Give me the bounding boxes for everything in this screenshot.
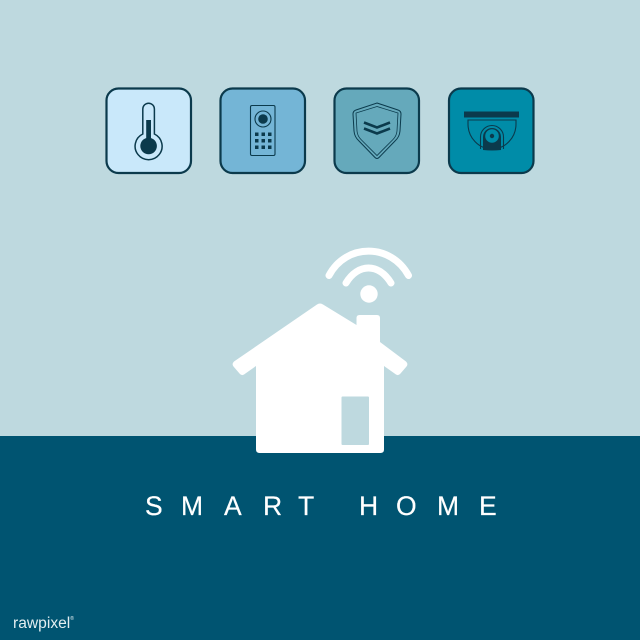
icon: video doorbell tile: [220, 88, 305, 173]
watermark: rawpixel logo: ®: [70, 615, 74, 622]
icon: house: [233, 304, 407, 453]
door: [342, 396, 369, 445]
icon: wifi signal: [329, 251, 408, 303]
icon: thermometer tile: [106, 88, 191, 173]
panel: dark ground band: [0, 436, 640, 640]
watermark: rawpixel logo: rawpixel: [13, 615, 70, 632]
icon: security shield tile: [334, 88, 419, 173]
icon: dome security camera tile: [449, 88, 534, 173]
panel: light sky background: [0, 0, 640, 436]
title: SMART HOME: [145, 491, 497, 521]
